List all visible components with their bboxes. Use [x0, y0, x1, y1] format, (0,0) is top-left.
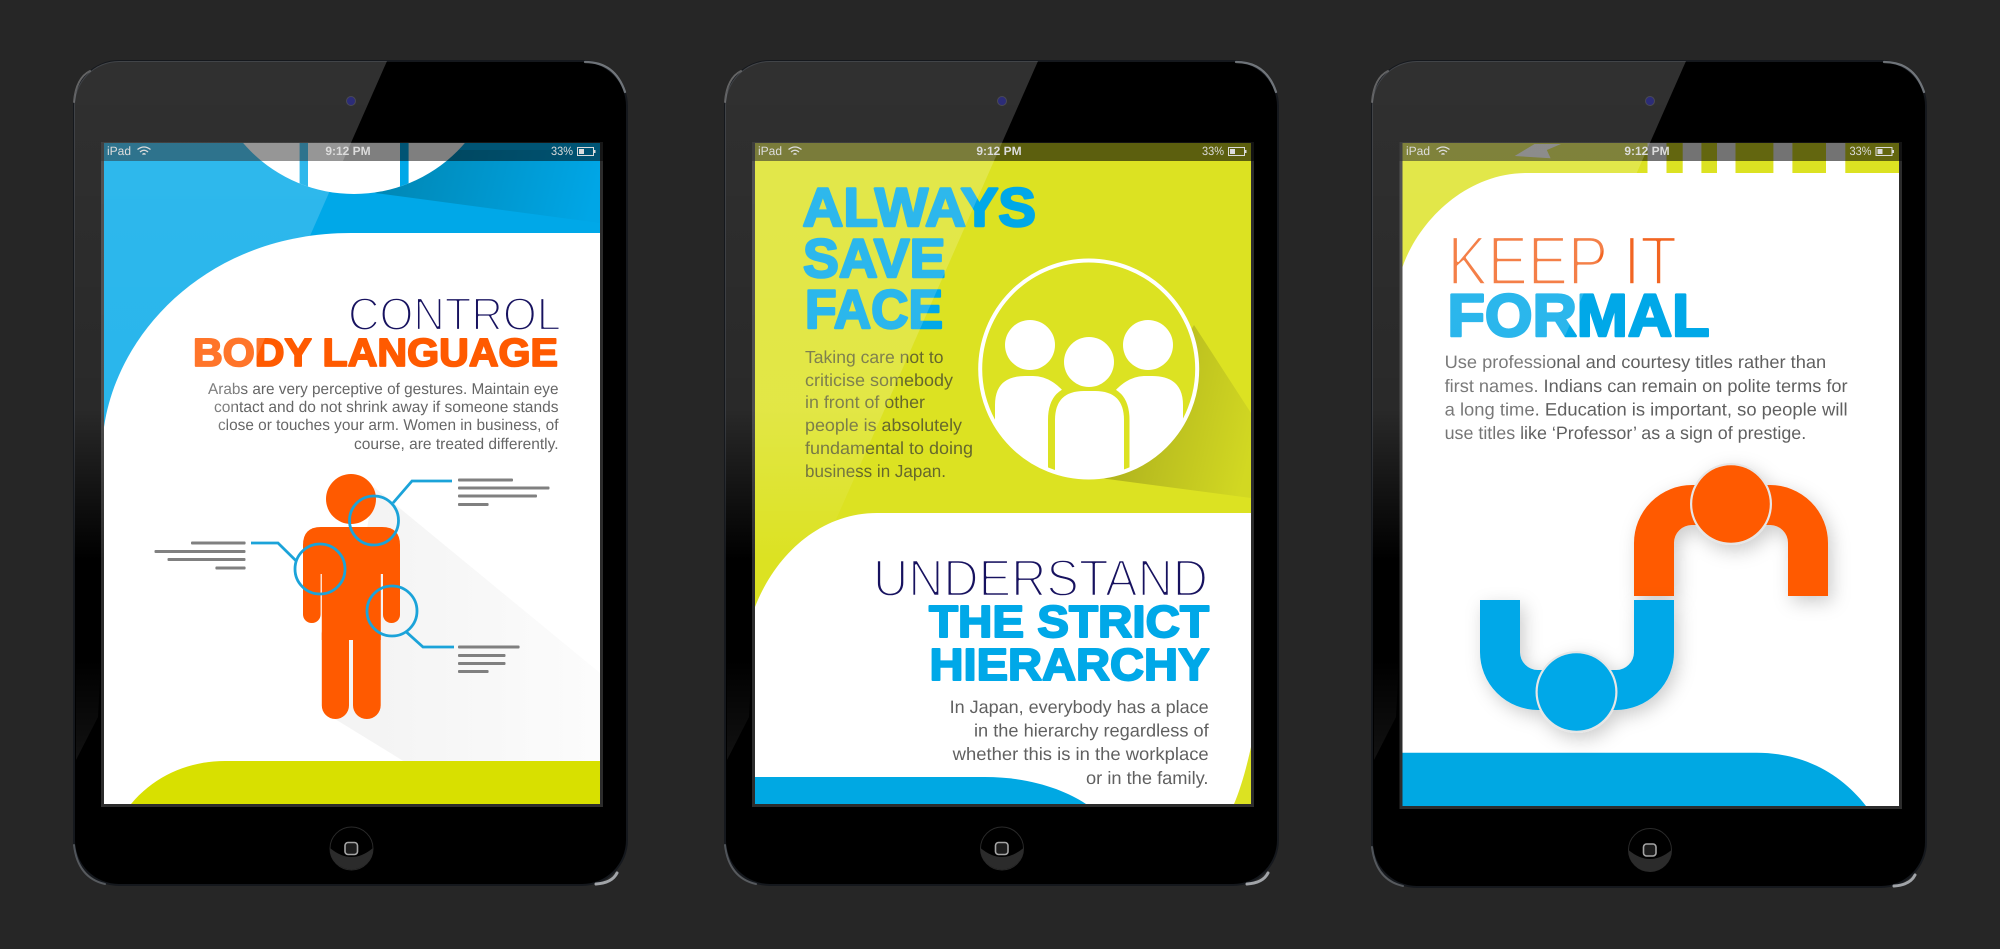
body text: save face: people is absolutely — [805, 415, 962, 435]
body text: save face: business in Japan. — [805, 461, 946, 481]
glass reflection — [1372, 61, 1686, 529]
lower bezel reflection — [727, 660, 752, 760]
glass reflection — [74, 61, 387, 529]
callouts: rings and leader lines — [251, 481, 454, 647]
tablet 1: control body language — [60, 0, 627, 885]
heading: always save face: FACE — [805, 279, 943, 340]
blue footer — [755, 777, 1086, 804]
circle shadow — [375, 150, 576, 218]
glass reflection — [725, 61, 1038, 529]
status bar labels: iPad — [1406, 144, 1430, 158]
tablet 2: always save face — [711, 61, 1278, 885]
status bar labels: 33% — [551, 144, 573, 158]
body text: first names. Indians can remain on polite terms for — [1445, 376, 1848, 396]
heading: the strict hierarchy: HIERARCHY — [930, 639, 1210, 690]
top white gaps and shape — [1515, 143, 1845, 174]
body text: hierarchy: or in the family. — [1086, 768, 1208, 788]
status bar labels: 9:12 PM — [1624, 144, 1670, 158]
icon: orange person — [303, 474, 400, 719]
body text: save face: in front of other — [805, 392, 925, 412]
tablet 3: keep it formal — [1358, 61, 1926, 887]
body text: hierarchy: whether this is in the workplace — [952, 744, 1209, 764]
white curved panel — [1402, 173, 1899, 806]
blue figure — [1500, 600, 1654, 733]
heading: formal: FORMAL — [1448, 282, 1710, 349]
heading: keep it: KEEP IT — [1448, 221, 1677, 299]
body text: Arabs are very perceptive of gestures. Maintain eye — [208, 381, 558, 398]
body text: a long time. Education is important, so people will — [1445, 400, 1848, 420]
screen content — [1402, 143, 1899, 806]
status bar labels: 33% — [1850, 144, 1872, 158]
bezel highlights — [74, 62, 625, 884]
lime footer — [131, 761, 600, 804]
status bar labels: 9:12 PM — [325, 144, 371, 158]
body text: close or touches your arm. Women in business, of — [218, 417, 559, 434]
body text: save face: Taking care not to — [805, 347, 944, 367]
status bar labels: 9:12 PM — [976, 144, 1022, 158]
top circle icon — [243, 143, 465, 194]
home button — [1628, 828, 1672, 872]
heading: understand: UNDERSTAND — [873, 550, 1208, 608]
screen frame — [1400, 142, 1902, 809]
orange figure — [1654, 463, 1808, 596]
heading: control: CONTROL — [348, 288, 561, 340]
person long shadow — [336, 488, 458, 761]
body text: contact and do not shrink away if someone stands — [214, 399, 559, 416]
white curved panel — [755, 513, 1251, 804]
screen content — [104, 143, 600, 804]
tablet body — [1372, 61, 1926, 887]
tablet body — [74, 61, 627, 885]
body text — [208, 381, 559, 453]
camera — [346, 96, 356, 106]
body text: save face: criticise somebody — [805, 370, 953, 390]
body text: course, are treated differently. — [354, 436, 558, 453]
body text: hierarchy: In Japan, everybody has a place — [950, 697, 1209, 717]
heading: always save face: ALWAYS — [802, 177, 1036, 238]
body text: save face: fundamental to doing — [805, 438, 973, 458]
circle long shadow — [1100, 325, 1251, 498]
heading: the strict hierarchy — [928, 604, 1210, 682]
status bar labels: iPad — [107, 144, 131, 158]
bezel highlights — [725, 62, 1276, 884]
status bar labels: iPad — [758, 144, 782, 158]
icon: group in circle — [979, 259, 1199, 500]
body text: hierarchy: in the hierarchy regardless of — [974, 721, 1210, 741]
status bar — [1400, 142, 1902, 161]
camera — [1646, 96, 1654, 106]
bezel highlights — [1372, 62, 1924, 886]
lower bezel reflection — [76, 660, 101, 760]
heading: always save face — [802, 186, 1035, 330]
status bar — [752, 142, 1254, 161]
status bar labels — [1406, 144, 1894, 158]
lower bezel reflection — [1374, 660, 1399, 760]
tablet body — [725, 61, 1278, 885]
camera — [998, 96, 1006, 106]
white curved panel — [104, 233, 600, 804]
status bar labels — [758, 144, 1246, 158]
body text: Use professional and courtesy titles rather than — [1445, 352, 1826, 372]
icon: bowing figures — [1500, 463, 1808, 733]
screen frame — [101, 142, 603, 807]
body text: use titles like ‘Professor’ as a sign of prestige. — [1445, 423, 1806, 443]
status bar labels: 33% — [1202, 144, 1224, 158]
screen frame — [752, 142, 1254, 807]
heading: the strict hierarchy: THE STRICT — [929, 596, 1209, 647]
home button — [980, 827, 1024, 870]
heading: always save face: SAVE — [803, 228, 946, 289]
heading: body language: BODY LANGUAGE — [193, 331, 558, 375]
blue footer — [1402, 753, 1866, 806]
body text — [1445, 352, 1848, 443]
screen content — [755, 143, 1251, 804]
callout placeholder bars — [154, 478, 550, 673]
status bar — [101, 142, 603, 161]
body text: hierarchy — [950, 697, 1210, 788]
body text: save face — [805, 347, 973, 481]
home button — [330, 827, 373, 870]
status bar labels — [107, 144, 596, 158]
